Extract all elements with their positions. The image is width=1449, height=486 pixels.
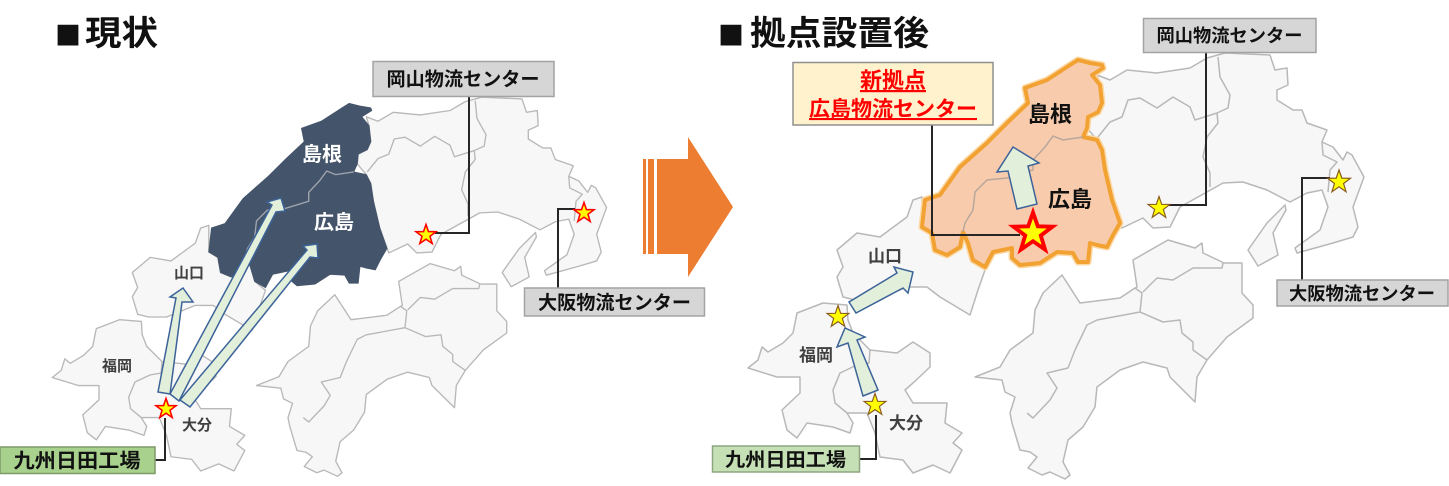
map label: Fukuoka: 福岡: [799, 346, 833, 365]
label: Okayama center: [373, 62, 554, 96]
label: Osaka center: 大阪物流センター: [1289, 284, 1435, 304]
title: current state: ■: [55, 16, 81, 53]
star: Hita factory: [156, 398, 176, 417]
map label: Fukuoka: 福岡: [102, 358, 132, 375]
map label: Yamaguchi: 山口: [174, 265, 204, 282]
connector: Okayama label to star: [1168, 53, 1206, 205]
map label: Hiroshima: 広島: [314, 211, 354, 234]
label: Osaka center: 大阪物流センター: [538, 292, 691, 314]
connector: new center label to star: [932, 125, 1020, 235]
title: after base establishment: 拠点設置後: [750, 15, 929, 53]
connector: Kyushu label to star: [155, 418, 165, 460]
star: Osaka center: [1328, 170, 1350, 192]
label: Kyushu Hita factory: [712, 446, 860, 472]
title: after base establishment: ■: [718, 16, 744, 53]
arrow: Hiroshima to Shimane: [997, 147, 1039, 209]
star: Hita factory: [864, 394, 886, 414]
callout: new Hiroshima center: 広島物流センター: [809, 98, 977, 121]
title: current state: [55, 15, 158, 53]
connector: Kyushu label to star: [859, 415, 876, 459]
label: Kyushu Hita factory: [0, 447, 155, 474]
arrow: Oita to Fukuoka: [837, 328, 878, 396]
map label: Yamaguchi: 山口: [868, 247, 902, 266]
map label: Oita: 大分: [182, 416, 212, 434]
arrow: Kyushu to Yamaguchi: [158, 288, 193, 394]
callout: new Hiroshima center: [793, 62, 993, 125]
label: Okayama center: [1144, 18, 1316, 52]
map: current state: [52, 97, 607, 476]
star: new Hiroshima center: [1014, 212, 1052, 250]
arrow: current to after: [643, 137, 733, 277]
label: Okayama center: 岡山物流センター: [1156, 26, 1302, 46]
map: after base establishment: [748, 53, 1364, 479]
label: Kyushu Hita factory: 九州日田工場: [725, 449, 846, 471]
arrow: Kyushu to Shimane: [170, 198, 285, 401]
star: Okayama center: [1148, 196, 1170, 217]
label: Kyushu Hita factory: 九州日田工場: [14, 450, 140, 472]
map label: Hiroshima: 広島: [1048, 187, 1092, 212]
star: Osaka center: [574, 202, 594, 221]
connector: Osaka label to star: [558, 209, 575, 288]
title: current state: 現状: [85, 15, 158, 53]
label: Osaka center: [1277, 280, 1448, 306]
label: Okayama center: 岡山物流センター: [386, 68, 540, 90]
star: Fukuoka waypoint: [827, 306, 849, 326]
arrow: Kyushu to Hiroshima: [180, 244, 318, 407]
connector: Okayama label to star: [435, 96, 469, 233]
map label: Shimane: 島根: [1028, 102, 1072, 127]
star: Okayama center: [416, 224, 436, 243]
connector: Osaka label to star: [1302, 178, 1330, 280]
arrow: Fukuoka to Yamaguchi: [849, 267, 913, 313]
label: Osaka center: [524, 288, 704, 316]
callout: new Hiroshima center: 新拠点: [860, 68, 926, 93]
map label: Shimane: 島根: [302, 143, 342, 166]
map label: Oita: 大分: [889, 414, 923, 433]
